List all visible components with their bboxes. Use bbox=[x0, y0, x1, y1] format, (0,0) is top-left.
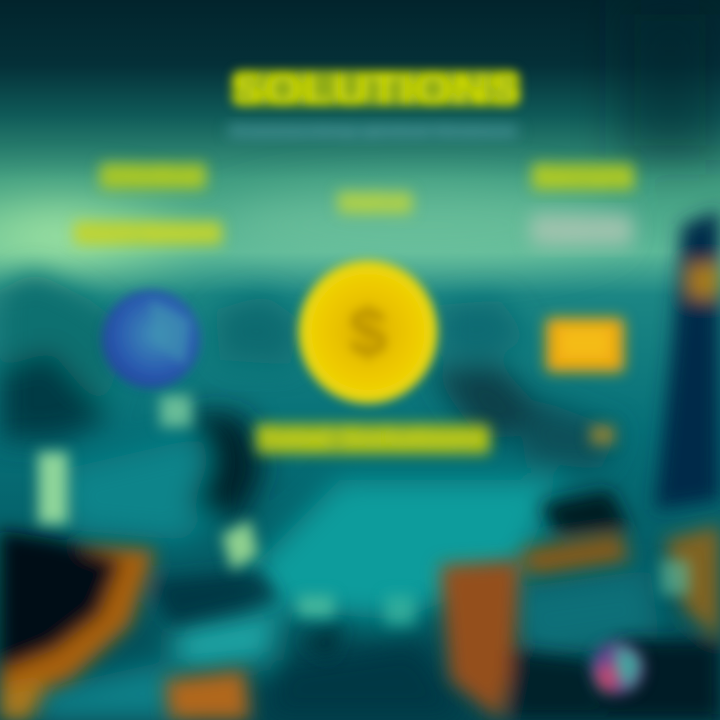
icon: gold coin: $ bbox=[349, 293, 387, 371]
accent streaks bbox=[38, 395, 690, 625]
caption: Total Solutions bbox=[255, 420, 491, 456]
right tower bbox=[655, 210, 720, 510]
column 2 heading: Value bbox=[336, 187, 414, 218]
foreground dark rocks with orange edges bbox=[0, 490, 720, 720]
title: SOLUTIONS bbox=[230, 65, 522, 114]
column 3 subheading: Protected bbox=[530, 218, 634, 243]
mountain landscape bbox=[0, 272, 660, 720]
icon: gold coin bbox=[298, 260, 438, 404]
column 1 heading: Global bbox=[99, 160, 207, 193]
column 1 subheading: Reach Network bbox=[73, 218, 223, 249]
icon: small multicolour badge bbox=[592, 642, 644, 694]
subtitle bbox=[228, 124, 518, 139]
background glow bbox=[0, 0, 720, 290]
icon: orange badge bbox=[546, 318, 624, 372]
column 3 heading: Secure bbox=[531, 161, 635, 194]
subtitle: Connecting global finance bbox=[230, 124, 516, 139]
icon: globe bbox=[102, 290, 200, 388]
